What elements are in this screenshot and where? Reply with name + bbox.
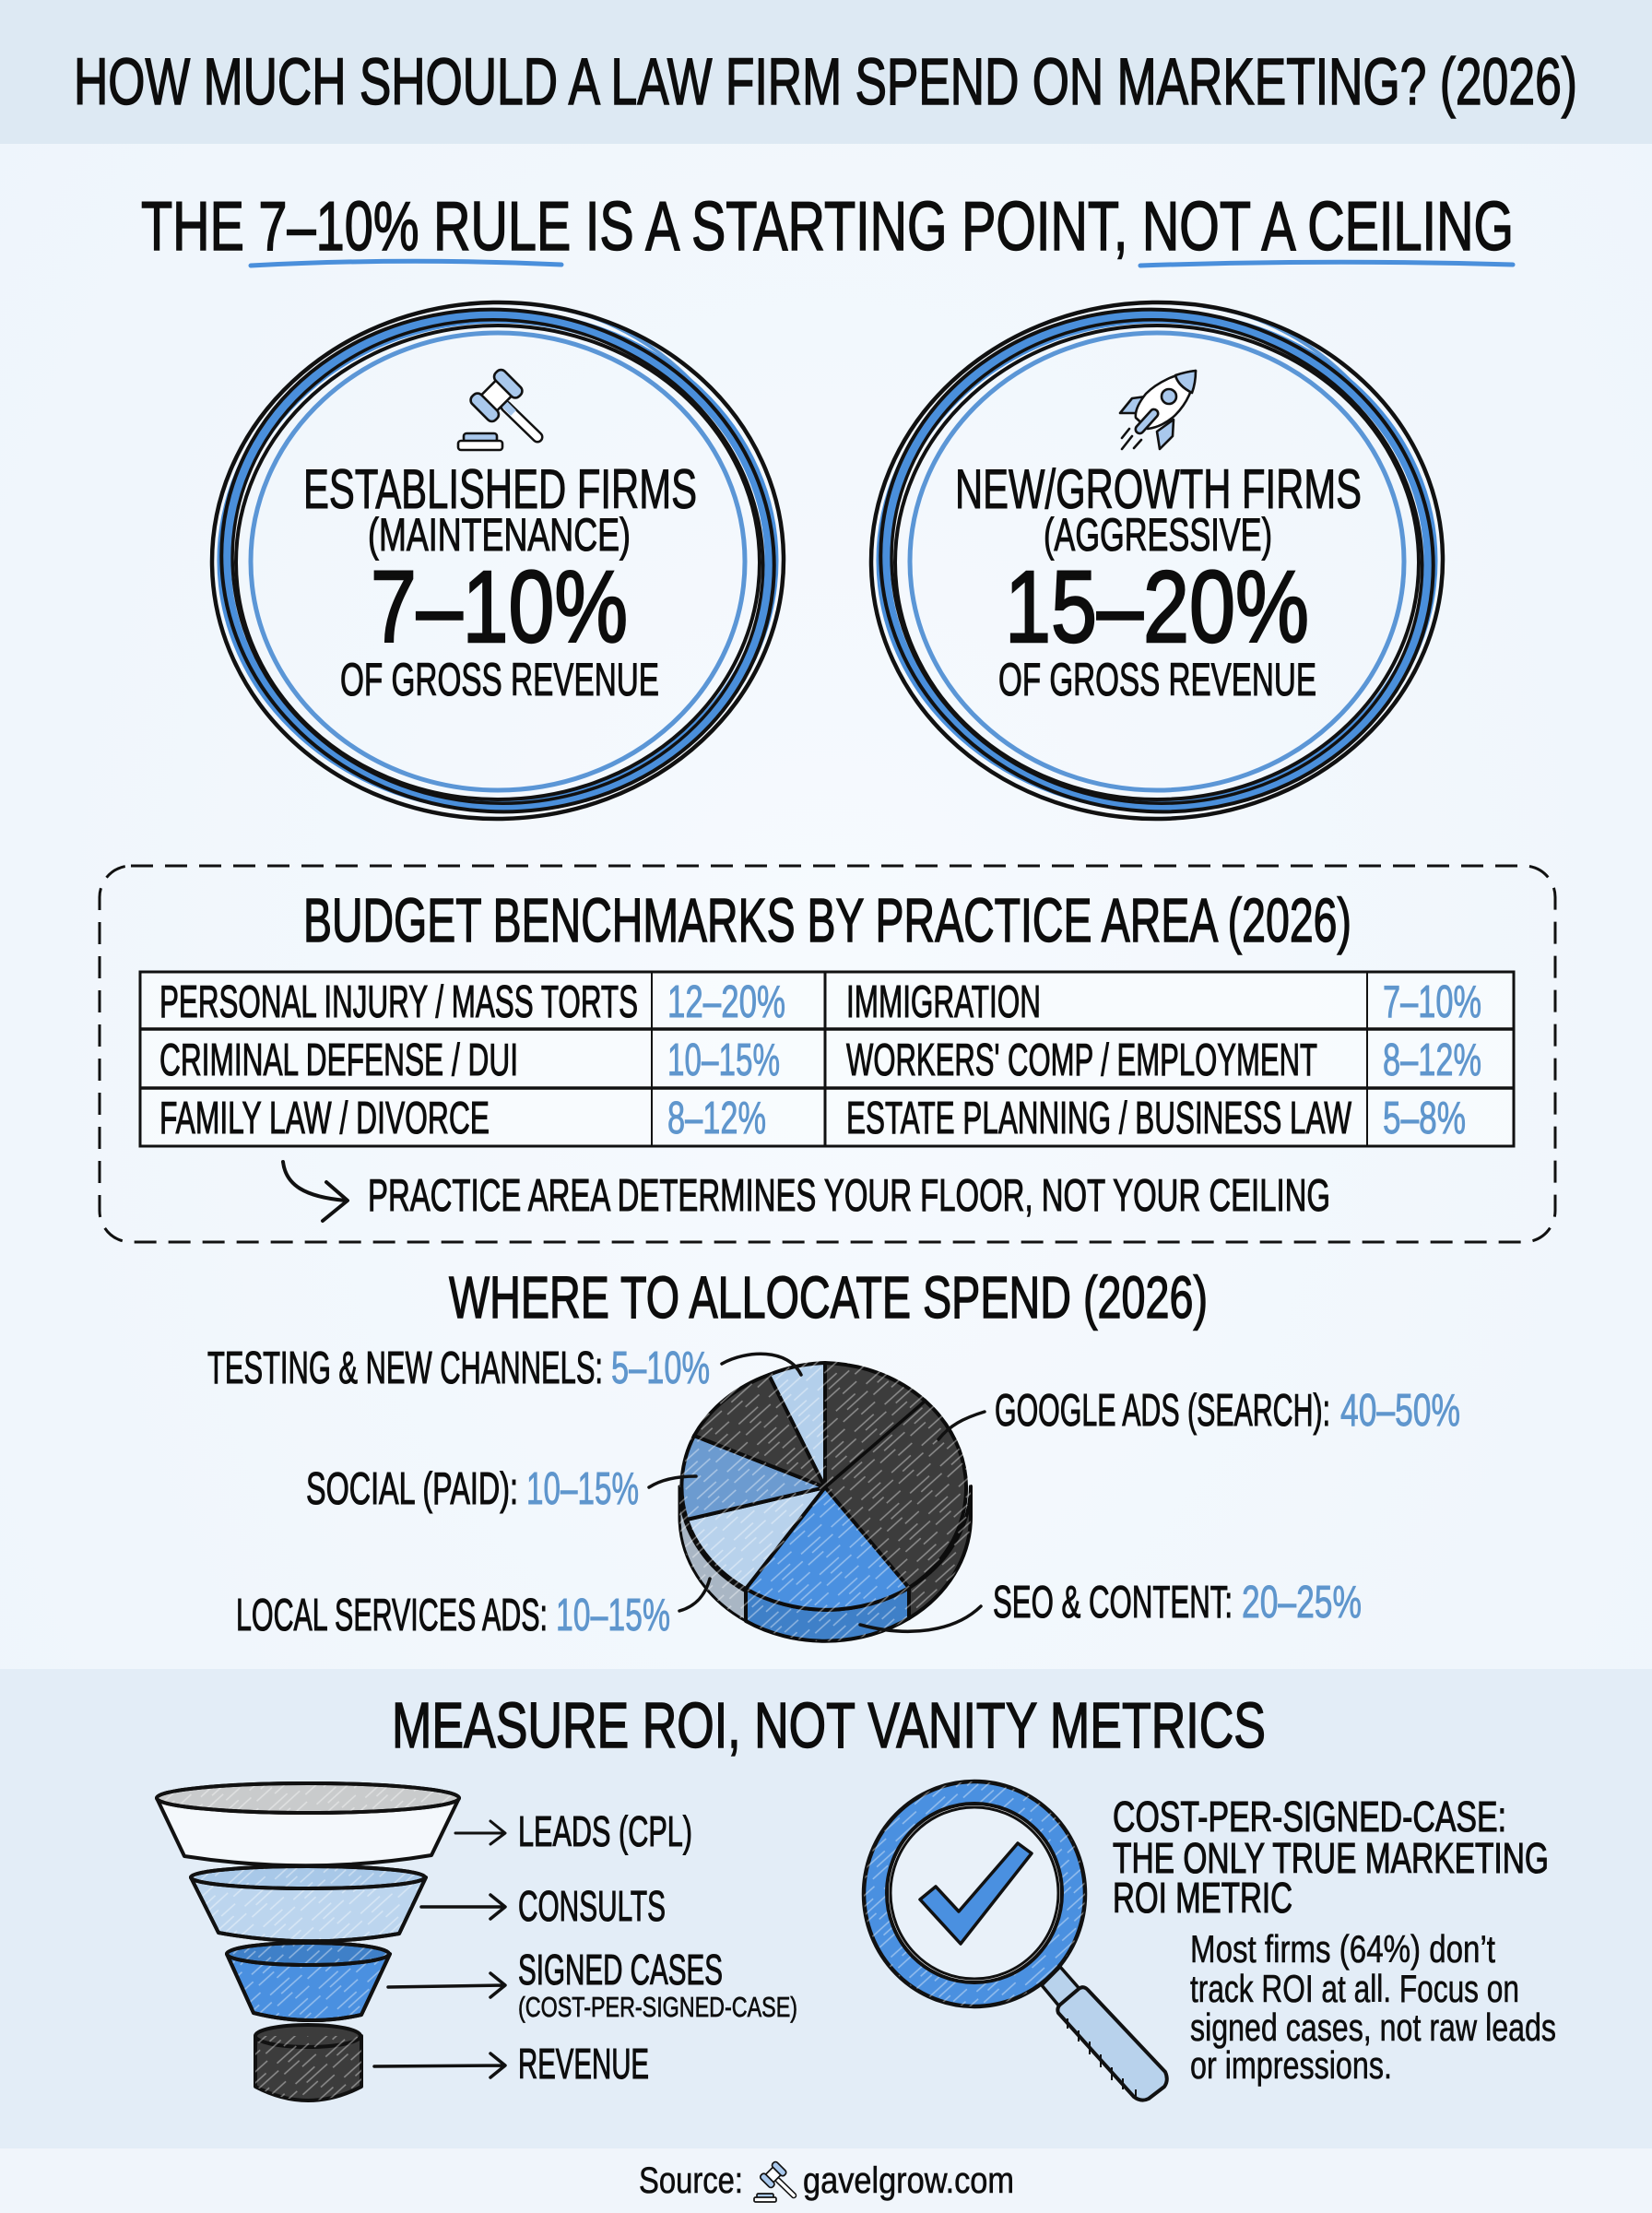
source footer [0,2148,1652,2213]
funnel labels: SIGNED CASES [518,1946,723,1994]
label: seo: 20–25% [1242,1578,1362,1627]
panel: established firms: (MAINTENANCE) [368,509,631,561]
panel: established firms: 7–10% [371,550,628,664]
callout heading [1113,1793,1549,1922]
sketched ring [196,282,799,839]
label: testing: TESTING & NEW CHANNELS: [207,1343,603,1393]
panel: allocation [207,1264,1460,1641]
table rows: 12–20% [667,977,785,1027]
title banner [0,0,1652,144]
source footer: Source: [639,2160,743,2201]
funnel labels: (COST-PER-SIGNED-CASE) [518,1991,797,2023]
label: local services: 10–15% [556,1591,670,1640]
callout heading: ROI METRIC [1113,1874,1292,1922]
table rows: IMMIGRATION [846,977,1041,1027]
source footer: gavelgrow.com [803,2160,1014,2201]
table rows: 5–8% [1383,1094,1466,1143]
table rows: CRIMINAL DEFENSE / DUI [159,1035,518,1085]
table rows: 10–15% [667,1035,780,1085]
label: google ads: 40–50% [1340,1386,1460,1436]
table rows: PERSONAL INJURY / MASS TORTS [159,977,638,1027]
panel: new/growth firms [856,282,1458,839]
leader lines [649,1354,985,1631]
icon: gavel [458,368,537,450]
panel: new/growth firms: 15–20% [1005,550,1309,664]
sketched ring [856,282,1458,839]
table rows: ESTATE PLANNING / BUSINESS LAW [846,1094,1351,1143]
icon: small gavel [754,2160,794,2202]
panel: new/growth firms: OF GROSS REVENUE [998,654,1316,705]
funnel stage: consults [191,1866,426,1941]
funnel stage: leads [157,1783,459,1865]
panel: new/growth firms: NEW/GROWTH FIRMS [955,458,1362,520]
table rows: FAMILY LAW / DIVORCE [159,1094,490,1143]
table rows: 8–12% [667,1094,766,1143]
panel: measure roi [0,1669,1652,2148]
heading: MEASURE ROI, NOT VANITY METRICS [392,1689,1266,1761]
funnel stage: revenue [255,2025,361,2101]
funnel arrows [374,1821,505,2077]
funnel labels [518,1807,797,2088]
funnel [157,1783,459,2101]
table rows: 8–12% [1383,1035,1481,1085]
funnel labels: CONSULTS [518,1882,666,1930]
panel: established firms: ESTABLISHED FIRMS [303,458,697,520]
arrow: to note [283,1162,348,1221]
heading: WHERE TO ALLOCATE SPEND (2026) [449,1264,1208,1331]
panel: established firms: OF GROSS REVENUE [340,654,659,705]
pie chart [679,1361,971,1641]
panel: budget benchmarks [100,866,1555,1242]
panel: established firms [196,282,799,839]
icon: check mark [920,1843,1032,1944]
callout body: Most firms (64%) don’t [1190,1927,1495,1970]
icon: magnifying glass [864,1781,1167,2101]
callout body [1190,1927,1556,2087]
callout heading: COST-PER-SIGNED-CASE: [1113,1793,1506,1840]
callout body: or impressions. [1190,2043,1392,2087]
panel: new/growth firms: (AGGRESSIVE) [1044,509,1272,561]
funnel labels: REVENUE [518,2040,649,2088]
funnel labels: LEADS (CPL) [518,1807,692,1855]
callout body: track ROI at all. Focus on [1190,1967,1519,2010]
label: testing: 5–10% [611,1343,710,1393]
table rows: WORKERS' COMP / EMPLOYMENT [846,1035,1317,1085]
label: social: SOCIAL (PAID): [306,1464,518,1514]
label: local services: LOCAL SERVICES ADS: [236,1591,548,1640]
label: seo: SEO & CONTENT: [993,1578,1233,1627]
label: google ads: GOOGLE ADS (SEARCH): [995,1386,1330,1436]
table rows [159,977,1481,1143]
table grid [140,972,1514,1146]
label: social: 10–15% [526,1464,639,1514]
funnel stage: signed cases [227,1943,390,2020]
icon: rocket [1120,371,1196,449]
table rows: 7–10% [1383,977,1481,1027]
